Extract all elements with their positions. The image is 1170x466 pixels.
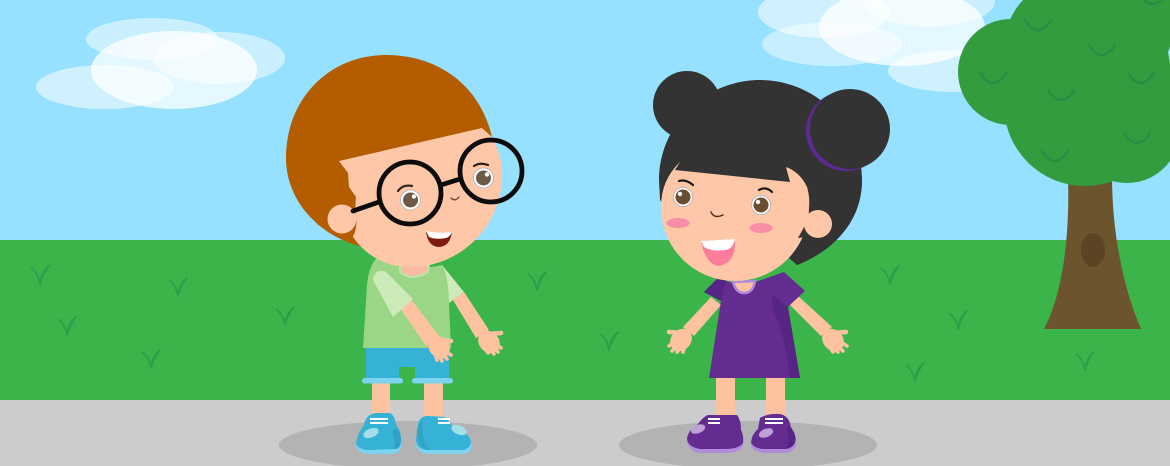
trunk knot [1081,233,1105,267]
girl eye left [674,188,692,206]
boy collar [400,264,429,277]
girl left shoe [687,415,743,453]
girl mouth [701,239,735,266]
boy glasses [353,140,522,224]
dress shading [772,295,800,378]
boy face [339,128,502,267]
tree foliage [958,0,1170,186]
girl face [661,162,809,281]
boy right shoe [416,416,472,454]
boy left shoe [356,413,401,454]
road [0,400,1170,466]
boy nose [451,197,459,200]
sky [0,0,1170,240]
boy eyebrows [398,164,488,191]
girl left arm and hand [666,297,721,356]
girl right bun [810,89,890,169]
ground shadow: girl [619,421,877,466]
foliage marks [980,0,1166,161]
foliage edge notch [1168,47,1170,64]
girl dress [704,272,805,378]
boy shorts cuffs [362,378,453,384]
girl collar [733,281,755,293]
boy legs [372,380,443,418]
cloud: left [36,18,285,109]
girl hair [659,80,862,265]
dress sleeve shading [704,278,726,301]
girl ear [798,210,832,238]
girl eye right [752,196,770,214]
girl left bun [653,71,721,139]
girl eyebrows [679,180,772,192]
boy [286,55,522,454]
boy right sleeve [442,265,464,303]
girl right shoe [751,414,796,453]
boy eye left [400,190,420,210]
grass field [0,240,1170,400]
girl right bun band [806,91,886,171]
grass tufts [31,266,1094,381]
boy shorts [366,348,449,378]
girl hair lower back [780,180,862,265]
girl [653,71,890,453]
boy eye right [474,168,494,188]
girl nose [711,212,723,216]
boy hair [286,55,492,247]
boy mouth [426,231,452,247]
boy right arm and hand [453,292,504,358]
boy left arm and hand [400,299,454,363]
cloud: right [758,0,1020,92]
boy left sleeve [373,271,413,317]
girl cheek right [750,223,772,233]
ground shadow: boy [279,421,537,466]
girl cheek left [666,218,690,228]
boy shirt [363,258,451,348]
tree trunk [1044,175,1141,329]
boy ear [328,204,357,235]
girl legs [716,375,785,419]
girl right arm and hand [789,295,848,356]
tree [958,0,1170,329]
